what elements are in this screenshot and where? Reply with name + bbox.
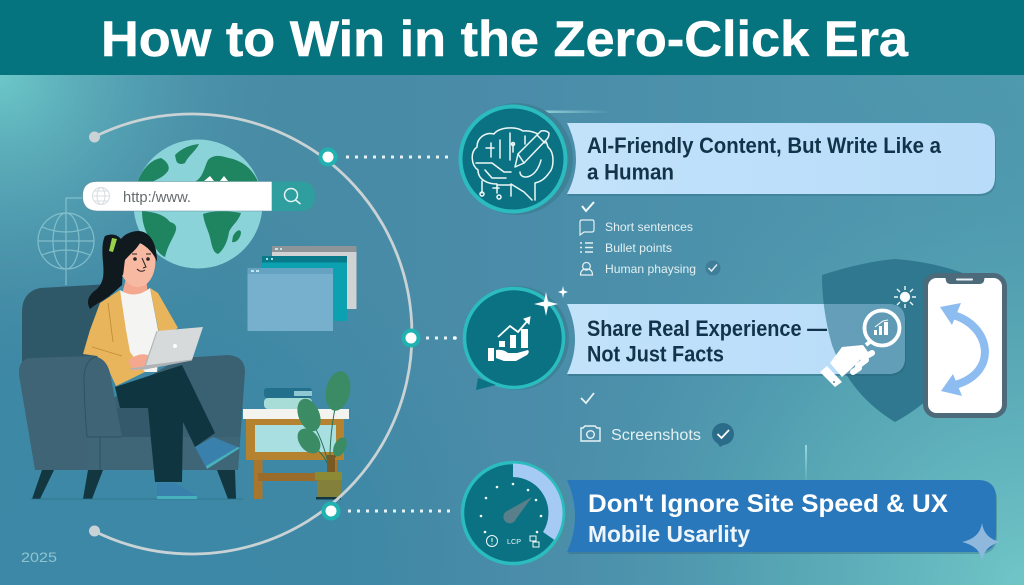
connector arc <box>89 114 420 554</box>
icon: sparkle <box>962 523 1000 561</box>
icon: checkmark <box>582 202 594 211</box>
shield <box>822 259 968 422</box>
panel: site speed and UX <box>462 461 1000 565</box>
banner 2 heading: Not Just Facts <box>587 342 724 366</box>
panel: AI-friendly content <box>460 103 996 276</box>
checklist <box>581 393 734 447</box>
banner 3 subheading: Mobile Usarlity <box>588 521 750 547</box>
icon: person <box>580 262 592 275</box>
icon: brain and pencil <box>460 106 566 212</box>
item: Screenshots <box>611 427 701 444</box>
checklist <box>580 202 720 276</box>
node 3 <box>322 502 340 520</box>
url text: http:/www. <box>123 190 191 206</box>
banner 2 <box>567 304 906 376</box>
icon: hand with magnifier <box>820 310 900 387</box>
banner 1 heading: a Human <box>587 160 674 184</box>
side table with books <box>243 388 349 499</box>
hair <box>117 231 157 278</box>
hair tie <box>109 238 117 252</box>
neck <box>122 275 148 296</box>
item 1: Short sentences <box>605 220 693 234</box>
search bar <box>82 182 315 211</box>
icon: speed gauge: LCP <box>507 537 521 546</box>
year label: 2025 <box>21 549 57 565</box>
icon: speed gauge <box>462 462 564 564</box>
laptop <box>130 327 203 369</box>
icon: globe favicon <box>92 188 110 204</box>
sparkles <box>453 286 568 340</box>
banner 3 heading: Don't Ignore Site Speed & UX <box>588 490 948 518</box>
node 2 <box>402 328 420 348</box>
icon: sun <box>894 286 916 308</box>
item 3: Human phaysing <box>605 262 696 276</box>
potted plant <box>293 369 354 500</box>
hand <box>128 354 148 371</box>
armchair <box>22 284 245 499</box>
banner 1 heading: AI-Friendly Content, But Write Like a <box>587 133 942 158</box>
facial features <box>132 254 151 271</box>
dotted connectors <box>346 157 458 511</box>
banner 1 <box>567 123 996 196</box>
armchair left arm <box>19 356 122 470</box>
icon: small wireframe globe <box>38 198 94 285</box>
cardigan <box>83 288 178 386</box>
icon: growth chart on hand <box>464 288 564 390</box>
face <box>118 243 155 287</box>
icon: chat bubble <box>580 220 594 235</box>
item 2: Bullet points <box>605 241 672 255</box>
title banner <box>0 0 1024 75</box>
lower shoe <box>157 483 197 499</box>
icon: world globe <box>134 140 262 268</box>
title: How to Win in the Zero-Click Era <box>101 11 909 67</box>
icon: checkmark <box>581 393 594 403</box>
banner 2 heading: Share Real Experience — <box>587 316 827 341</box>
icon: camera <box>581 426 600 441</box>
banner 3 <box>567 480 997 554</box>
legs <box>115 365 215 482</box>
icon: magnifier <box>284 188 300 204</box>
icon: check badge <box>706 260 720 276</box>
stacked browser windows <box>248 246 356 331</box>
ponytail <box>88 234 124 309</box>
upper shoe <box>195 437 240 469</box>
person with laptop <box>83 231 240 499</box>
t-shirt <box>120 288 160 372</box>
node 1 <box>318 148 338 166</box>
icon: phone with refresh arrows <box>926 275 1004 416</box>
icon: check badge <box>712 423 734 447</box>
panel: share real experience <box>453 286 906 447</box>
icon: list <box>580 243 593 252</box>
